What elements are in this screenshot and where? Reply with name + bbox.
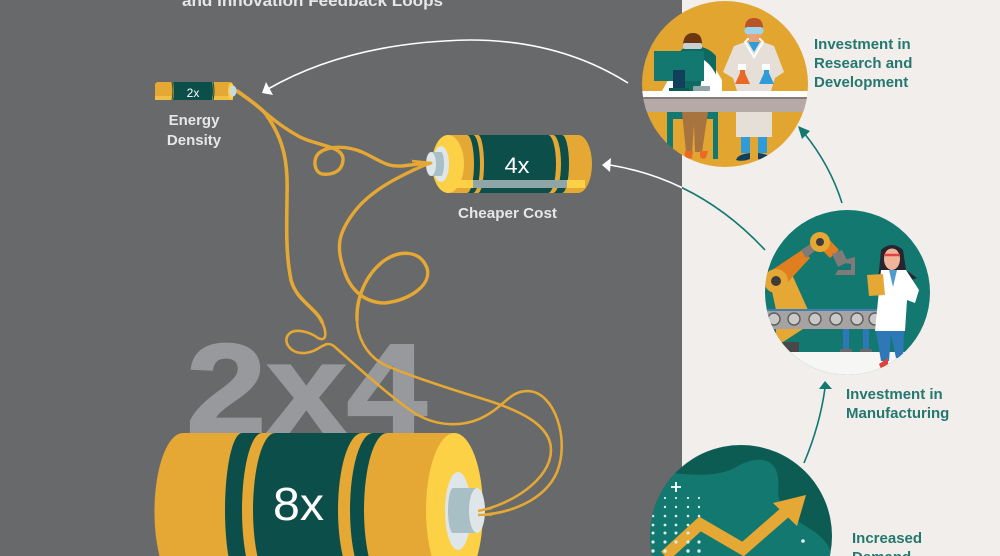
engineer with clipboard: [867, 245, 919, 369]
large battery: 8x: [154, 433, 492, 556]
panel: light background lower: [682, 318, 1000, 556]
label: manufacturing: Investment in: [846, 386, 943, 403]
teal blob: [640, 460, 832, 556]
small battery: energy density: 2x: [187, 86, 199, 100]
robot arm: [764, 232, 855, 352]
white dot: [801, 539, 805, 543]
medium battery: cheaper cost: [412, 135, 592, 193]
label: research and development: Investment in: [814, 36, 911, 53]
small battery: energy density: [155, 82, 236, 100]
conveyor belt: [762, 309, 882, 352]
label: research and development: Research and: [814, 55, 912, 72]
medium battery: cheaper cost: 4x: [504, 153, 530, 178]
label: research and development: Development: [814, 74, 908, 91]
big number 2x4: 2x4: [186, 318, 427, 461]
label: increased demand: Increased: [852, 530, 922, 547]
circle: manufacturing: [760, 210, 935, 382]
wires connecting batteries: [237, 91, 562, 515]
panel: dark background: [0, 0, 682, 556]
dot grid: [651, 497, 701, 553]
arrow: research to energy density: [262, 40, 628, 95]
factory floor: [790, 352, 904, 375]
circle: increased demand: [640, 445, 832, 556]
arrow: manufacturing to cheaper cost: [602, 158, 765, 250]
lab desk: [640, 91, 810, 112]
trend arrow: [665, 495, 806, 556]
label: energy density: Energy: [169, 112, 220, 129]
label: energy density: Density: [167, 132, 222, 149]
arrow: demand to manufacturing: [804, 381, 832, 463]
seated researcher: [654, 33, 722, 159]
arrow: manufacturing to research: [798, 126, 842, 203]
label: manufacturing: Manufacturing: [846, 405, 949, 422]
standing researcher: [723, 18, 784, 161]
circle: research and development: [640, 1, 810, 167]
plus sign: [671, 482, 681, 492]
large battery: 8x: 8x: [273, 478, 324, 530]
label: cheaper cost: Cheaper Cost: [458, 205, 557, 222]
panel: light background: [682, 0, 1000, 318]
